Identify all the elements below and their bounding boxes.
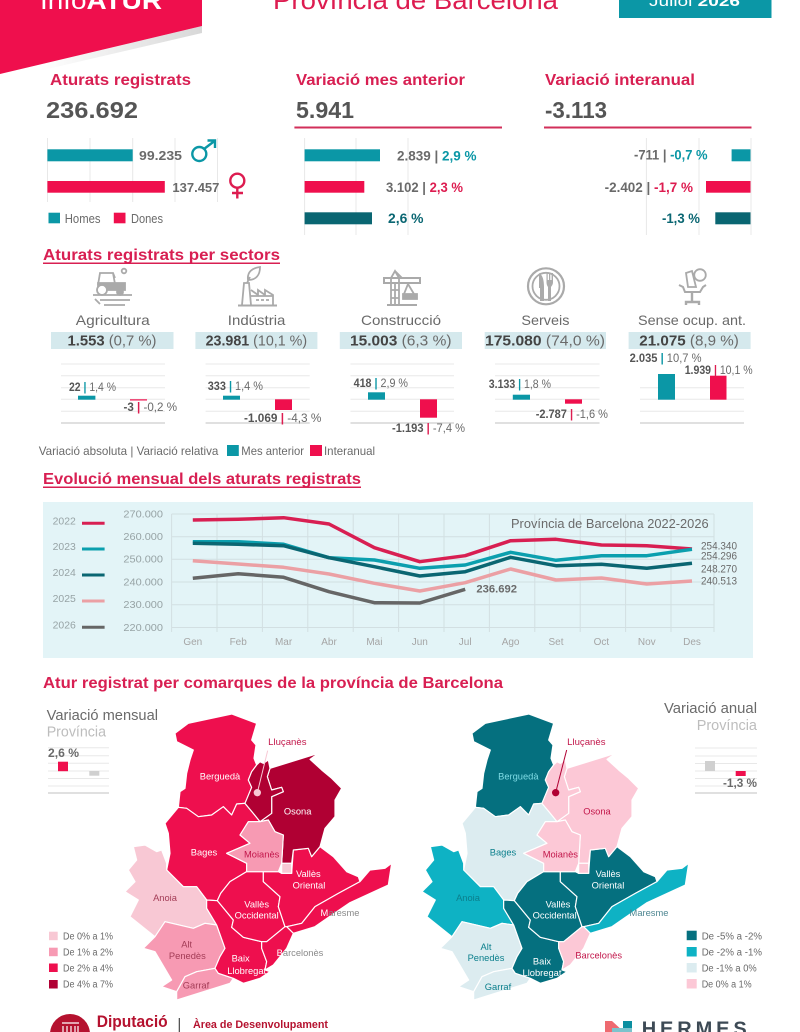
end labels: 240.513 — [701, 576, 737, 588]
heading: aturats registrats: Aturats registrats — [50, 72, 191, 89]
legend: anual: De -2% a -1% — [702, 948, 762, 958]
x axis: Gen — [183, 637, 202, 648]
footer: diputació logo: Àrea de Desenvolupament — [193, 1018, 328, 1031]
map labels: Occidental — [533, 910, 577, 920]
end labels: 248.270 — [701, 564, 737, 576]
x axis: Mar — [275, 637, 293, 648]
map labels: Berguedà — [498, 771, 539, 781]
legend: sectors: Variació absoluta | Variació relativa — [39, 444, 219, 458]
map labels: Vallès — [296, 869, 321, 879]
map labels: Osona — [284, 806, 312, 816]
legend: homes dones — [48, 212, 163, 226]
labels: construcció: -1.193 | -7,4 % — [392, 423, 465, 435]
panel: variació anual província: -1,3 % — [723, 778, 757, 790]
end labels: 236.692 — [476, 584, 517, 596]
map labels: Lluçanès — [567, 737, 606, 747]
icon: tractor — [93, 269, 132, 305]
sector: agricultura: 1.553 (0,7 %) — [68, 332, 157, 350]
heading: sectors: Aturats registrats per sectors — [43, 247, 280, 264]
legend: mensual — [49, 932, 113, 990]
y axis: 220.000 — [123, 622, 163, 634]
map labels: Penedès — [169, 951, 206, 961]
x axis: Abr — [321, 637, 337, 648]
bars: indústria — [223, 396, 292, 410]
map labels: Alt — [481, 942, 492, 952]
legend: anual — [687, 931, 762, 990]
legend: mensual: De 1% a 2% — [63, 948, 113, 958]
heading: evolució: Evolució mensual dels aturats registrats — [43, 471, 361, 488]
map labels: Moianès — [543, 850, 578, 860]
legend: mensual: De 4% a 7% — [63, 980, 113, 990]
legend: mensual: De 2% a 4% — [63, 964, 113, 974]
panel: sector values — [51, 312, 751, 350]
labels: sense ocupació: 1.939 | 10,1 % — [685, 365, 753, 377]
y axis — [123, 508, 163, 634]
icon: factory — [238, 267, 277, 306]
bar: homes — [732, 149, 750, 161]
icon: crane — [384, 271, 420, 305]
x axis: Feb — [230, 637, 247, 648]
header banner — [0, 0, 202, 80]
value: dones: 137.457 — [172, 180, 219, 195]
map labels: Oriental — [293, 880, 325, 890]
labels: indústria: 333 | 1,4 % — [208, 381, 263, 393]
bar: total — [305, 212, 372, 224]
year legend — [53, 516, 105, 632]
y axis: 270.000 — [123, 508, 163, 520]
map labels: Occidental — [235, 910, 279, 920]
year legend: 2022 — [53, 516, 76, 528]
map labels: Garraf — [183, 980, 210, 990]
value: homes: 2.839 | 2,9 % — [397, 148, 476, 164]
footer: diputació logo: Diputació — [97, 1012, 168, 1031]
year legend: 2023 — [53, 541, 76, 553]
map labels: Maresme — [630, 908, 668, 918]
panel: variació anual província: Província — [697, 718, 758, 734]
panel: variació interanual — [544, 72, 752, 235]
bar: homes — [47, 149, 133, 161]
icon: chair — [679, 269, 706, 305]
map labels: Baix — [232, 954, 250, 964]
panel: variació mes anterior — [294, 72, 502, 235]
labels: agricultura — [69, 382, 177, 414]
sector: construcció: Construcció — [361, 312, 441, 328]
x axis: Jul — [459, 637, 472, 648]
end labels: 254.296 — [701, 550, 737, 562]
value: total: 2,6 % — [388, 211, 424, 226]
series lines — [193, 518, 692, 603]
chart title: Província de Barcelona 2022-2026 — [511, 517, 709, 531]
icon: female — [230, 174, 244, 198]
map labels — [456, 737, 668, 992]
map labels: Vallès — [596, 869, 621, 879]
bars: agricultura — [78, 396, 147, 400]
x axis: Oct — [594, 637, 609, 648]
labels: sense ocupació: 2.035 | 10,7 % — [630, 353, 701, 365]
y axis: 250.000 — [123, 554, 163, 566]
end labels: 254.340 — [701, 540, 737, 552]
map labels: Alt — [181, 940, 193, 950]
legend: mensual: De 0% a 1% — [63, 932, 113, 942]
sector: construcció: 15.003 (6,3 %) — [350, 332, 452, 350]
sector: agricultura — [51, 312, 174, 350]
y axis: 260.000 — [123, 531, 163, 543]
labels: agricultura: -3 | -0,2 % — [124, 402, 177, 414]
map labels: Bages — [191, 847, 218, 857]
map: variació mensual — [125, 714, 392, 1000]
map labels: Barcelonès — [575, 950, 622, 960]
labels: indústria: -1.069 | -4,3 % — [244, 413, 321, 425]
total: 5.941 — [296, 97, 354, 123]
map labels: Vallès — [244, 899, 269, 909]
value: total: -1,3 % — [662, 211, 700, 226]
sector: serveis: 175.080 (74,0 %) — [485, 332, 605, 350]
labels: serveis — [489, 379, 608, 421]
legend: sectors — [39, 444, 375, 458]
panel: line chart — [43, 502, 753, 658]
pin: Lluçanès — [254, 751, 268, 796]
bar: dones — [305, 181, 364, 193]
panel: variació mensual província: 2,6 % — [48, 748, 79, 760]
labels: serveis: -2.787 | -1,6 % — [536, 409, 608, 421]
map labels: Anoia — [153, 893, 178, 903]
map labels: Moianès — [244, 850, 280, 860]
legend: sectors: Interanual — [324, 444, 375, 458]
end labels — [476, 540, 737, 596]
legend: anual: De -1% a 0% — [702, 964, 757, 974]
map labels: Maresme — [321, 908, 359, 918]
bars: construcció — [368, 392, 437, 418]
sector: serveis — [485, 312, 606, 350]
map labels: Baix — [533, 956, 551, 966]
sector: agricultura: Agricultura — [76, 312, 150, 328]
footer: diputació logo — [50, 1012, 328, 1032]
year legend: 2025 — [53, 593, 76, 605]
sector: indústria — [195, 312, 317, 350]
panel: variació mensual província — [47, 708, 158, 793]
legend: homes dones: Homes — [65, 212, 100, 226]
map: variació anual — [422, 714, 689, 1000]
map labels: Garraf — [485, 982, 512, 992]
labels: serveis: 3.133 | 1,8 % — [489, 379, 551, 391]
legend: homes dones: Dones — [131, 212, 163, 226]
x axis: Nov — [638, 637, 656, 648]
map labels: Vallès — [546, 899, 571, 909]
x axis: Jun — [412, 637, 428, 648]
bars: sense ocupació — [658, 374, 726, 400]
bar: homes — [305, 149, 380, 161]
x axis — [183, 637, 701, 648]
pin: Lluçanès — [552, 750, 567, 796]
bars: serveis — [513, 395, 582, 404]
value: dones: -2.402 | -1,7 % — [605, 180, 693, 195]
map labels: Llobregat — [227, 966, 267, 976]
legend: anual: De -5% a -2% — [702, 932, 762, 942]
sector: indústria: Indústria — [228, 312, 286, 328]
sector: sense ocupació anterior: Sense ocup. ant. — [638, 312, 746, 328]
icon: plate — [528, 268, 564, 304]
map labels: Barcelonès — [277, 948, 324, 958]
x axis: Ago — [502, 637, 520, 648]
labels: agricultura: 22 | 1,4 % — [69, 382, 116, 394]
map labels: Osona — [583, 806, 612, 816]
map labels: Penedès — [468, 953, 505, 963]
map labels: Oriental — [592, 880, 624, 890]
panel: aturats registrats — [46, 72, 244, 226]
sector: sense ocupació anterior — [629, 312, 751, 350]
labels: construcció — [354, 378, 465, 435]
y axis: 240.000 — [123, 576, 163, 588]
heading: Variació mes anterior — [296, 72, 465, 89]
sector: sense ocupació anterior: 21.075 (8,9 %) — [639, 332, 739, 350]
heading: Variació interanual — [545, 72, 695, 89]
map labels: Anoia — [456, 893, 481, 903]
year legend: 2026 — [53, 620, 76, 632]
y axis: 230.000 — [123, 599, 163, 611]
map labels: Lluçanès — [268, 737, 307, 747]
total: -3.113 — [545, 97, 607, 123]
x axis: Mai — [366, 637, 382, 648]
map labels: Berguedà — [200, 771, 241, 781]
legend: anual: De 0% a 1% — [702, 980, 752, 990]
labels: indústria — [208, 381, 321, 425]
labels: construcció: 418 | 2,9 % — [354, 378, 408, 390]
bar: total — [715, 212, 750, 224]
total: 236.692 — [46, 97, 138, 123]
value: homes: -711 | -0,7 % — [634, 148, 708, 162]
icon: male — [192, 140, 215, 161]
sector: indústria: 23.981 (10,1 %) — [206, 332, 307, 350]
map labels: Llobregat — [523, 968, 562, 978]
value: dones: 3.102 | 2,3 % — [386, 180, 463, 195]
panel: variació anual província: Variació anual — [664, 701, 757, 717]
map labels: Bages — [490, 847, 517, 857]
x axis: Des — [683, 637, 701, 648]
date badge — [619, 0, 772, 18]
map labels — [153, 737, 359, 990]
legend: sectors: Mes anterior — [241, 444, 304, 458]
heading: comarques: Atur registrat per comarques de la província de Barcelona — [43, 675, 503, 692]
sector: serveis: Serveis — [521, 312, 569, 328]
panel: variació mensual província: Variació mensual — [47, 708, 158, 724]
bar: dones — [47, 181, 165, 193]
grid — [172, 514, 714, 632]
labels: sense ocupació — [630, 353, 753, 377]
sector: construcció — [340, 312, 462, 350]
year legend: 2024 — [53, 567, 76, 579]
chart: sector variations — [61, 353, 753, 435]
value: homes: 99.235 — [139, 148, 182, 163]
panel: variació mensual província: Província — [47, 724, 107, 740]
bar: dones — [706, 181, 750, 193]
panel: variació anual província — [664, 701, 758, 793]
x axis: Set — [548, 637, 564, 648]
